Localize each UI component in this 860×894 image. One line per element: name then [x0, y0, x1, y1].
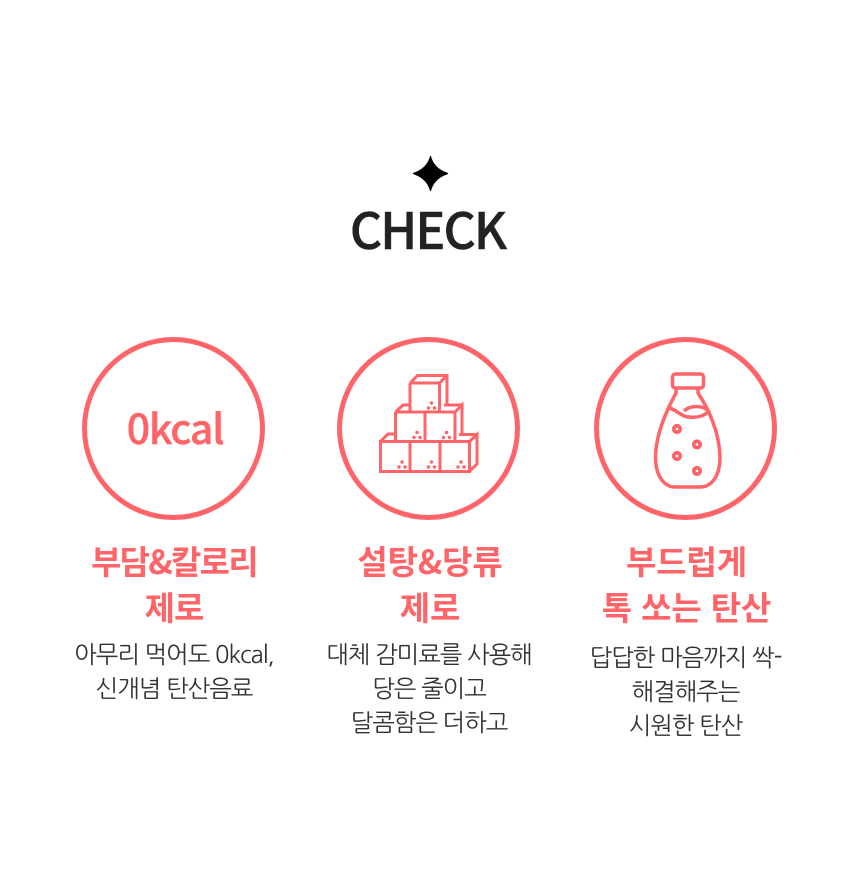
description: zero calorie: 아무리 먹어도 0kcal,	[74, 643, 274, 667]
icon: four-point star	[412, 156, 448, 192]
icon: 0kcal circle	[82, 337, 265, 520]
heading: soft carbonation: 톡 쏘는 탄산	[602, 582, 771, 630]
0kcal label: 0kcal	[127, 396, 223, 456]
icon: soda bottle	[654, 372, 722, 489]
description: soft carbonation: 답답한 마음까지 싹-	[590, 646, 781, 670]
description: zero sugar	[326, 643, 532, 735]
heading: zero sugar	[357, 536, 503, 630]
description: soft carbonation: 해결해주는	[632, 680, 739, 704]
title: CHECK	[350, 192, 505, 264]
heading: soft carbonation: 부드럽게	[626, 536, 747, 584]
description: zero calorie: 신개념 탄산음료	[96, 677, 252, 701]
description: zero sugar: 달콤함은 더하고	[351, 711, 507, 735]
panel: zero calorie	[74, 337, 274, 701]
icon: stacked sugar cubes	[379, 374, 478, 473]
icon: sugar cubes circle	[337, 337, 520, 520]
heading: soft carbonation	[602, 536, 771, 630]
description: zero calorie	[74, 643, 274, 701]
description: soft carbonation	[590, 646, 782, 738]
heading: zero calorie: 제로	[145, 582, 203, 630]
description: soft carbonation: 시원한 탄산	[629, 714, 742, 738]
description: zero sugar: 대체 감미료를 사용해	[326, 643, 532, 667]
heading: zero sugar: 설탕&당류	[357, 536, 503, 584]
panel: soft carbonation	[590, 337, 782, 738]
heading: zero sugar: 제로	[400, 582, 460, 630]
heading: zero calorie: 부담&칼로리	[91, 536, 257, 584]
icon: bottle circle	[594, 337, 777, 520]
description: zero sugar: 당은 줄이고	[372, 677, 486, 701]
panel: zero sugar	[326, 337, 532, 735]
heading: zero calorie	[91, 536, 257, 630]
